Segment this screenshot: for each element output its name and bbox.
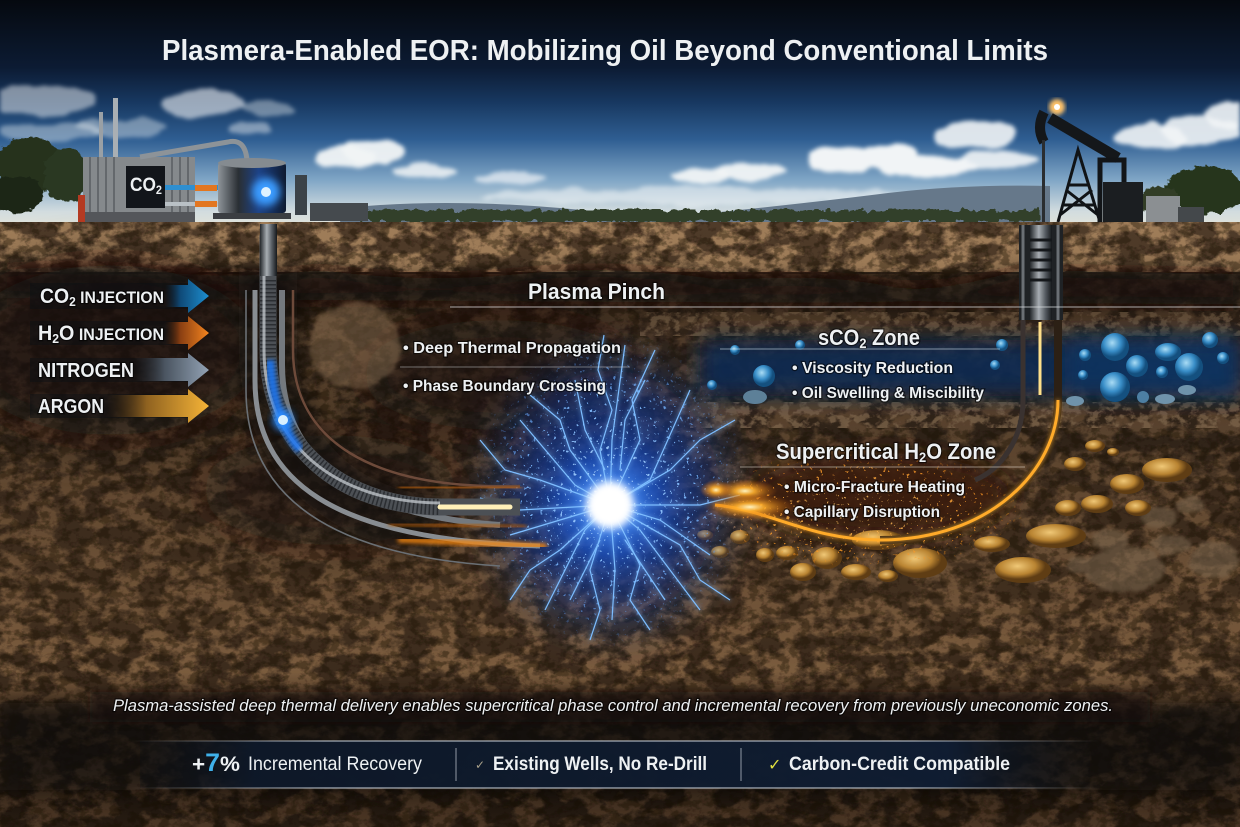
bullet: phase boundary crossing: • Phase Boundary Crossing (403, 378, 606, 395)
bullet: oil swelling: • Oil Swelling & Miscibility (792, 385, 984, 402)
heading: sCO2 zone: Zone (866, 325, 920, 350)
arrow: CO2 injection: 2 (69, 294, 76, 309)
orange heat streaks (390, 487, 545, 546)
heading: supercritical H2O zone: Supercritical H (776, 439, 931, 464)
arrow: H2O injection: INJECTION (74, 325, 164, 344)
orange sparks (690, 450, 1030, 570)
title: Plasmera-Enabled EOR: Mobilizing Oil Beyond Conventional Limits (162, 35, 1048, 67)
benefit: carbon-credit: ✓ (768, 757, 781, 774)
oil-bearing rocks (697, 440, 1192, 583)
facility CO2 label: CO (130, 175, 158, 196)
footer caption: Plasma-assisted deep thermal delivery enables supercritical phase control and incremental recovery from previously uneconomic zones. (113, 696, 1113, 715)
heading: plasma pinch: Plasma Pinch (528, 279, 665, 304)
arrow: nitrogen: NITROGEN (38, 360, 134, 382)
arrow: argon (30, 389, 209, 423)
cracked grey rocks (1065, 497, 1240, 592)
soil cross-section (0, 222, 1240, 827)
bullet: deep thermal propagation: • Deep Thermal Propagation (403, 340, 621, 357)
stat: +7% incremental recovery: Incremental Recovery (248, 754, 422, 775)
arrow: H2O injection (30, 316, 209, 350)
bubbles (707, 332, 1229, 406)
callout: plasma pinch (400, 279, 1240, 395)
heading: sCO2 zone: sCO (818, 325, 863, 350)
distant hills (340, 186, 1050, 222)
pump jack (1040, 99, 1204, 222)
sky background (0, 0, 1240, 225)
heading: supercritical H2O zone: 2 (919, 449, 926, 465)
arrow: argon: ARGON (38, 396, 104, 418)
benefit: existing wells: Existing Wells, No Re-Drill (493, 754, 707, 775)
callout: sCO2 zone (720, 325, 1000, 402)
arrow: CO2 injection: CO (40, 285, 72, 308)
CO2 surface facility (78, 98, 368, 222)
injection well (246, 224, 545, 566)
clouds (0, 85, 1240, 204)
panel: supercritical water zone (690, 440, 1240, 592)
benefit: carbon-credit: Carbon-Credit Compatible (789, 754, 1010, 775)
bullet: capillary disruption: • Capillary Disruption (784, 504, 940, 521)
callout: supercritical H2O zone (740, 439, 1025, 521)
plasma burst (470, 330, 750, 650)
footer caption (90, 692, 1150, 724)
arrow: CO2 injection (30, 279, 209, 313)
arrow: nitrogen (30, 353, 209, 387)
arrow: H2O injection: O (59, 322, 74, 345)
stat: +7% incremental recovery (192, 749, 422, 777)
heading: supercritical H2O zone: O Zone (926, 439, 996, 464)
benefit: existing wells: ✓ (475, 758, 485, 772)
panel: sCO2 reservoir zone (690, 332, 1240, 406)
production well (700, 225, 1063, 540)
stat: +7% incremental recovery: +7% (192, 749, 240, 777)
arrow: H2O injection: H (38, 322, 53, 345)
arrow: CO2 injection: INJECTION (76, 288, 164, 307)
arrow: H2O injection: 2 (52, 331, 59, 346)
facility CO2 label: 2 (156, 183, 162, 197)
tree lines (0, 137, 1240, 222)
injection gas legend (30, 279, 209, 423)
key benefits bar (130, 741, 1100, 788)
heading: sCO2 zone: 2 (859, 335, 867, 351)
bullet: viscosity reduction: • Viscosity Reduction (792, 360, 953, 377)
bullet: micro-fracture heating: • Micro-Fracture Heating (784, 479, 965, 496)
